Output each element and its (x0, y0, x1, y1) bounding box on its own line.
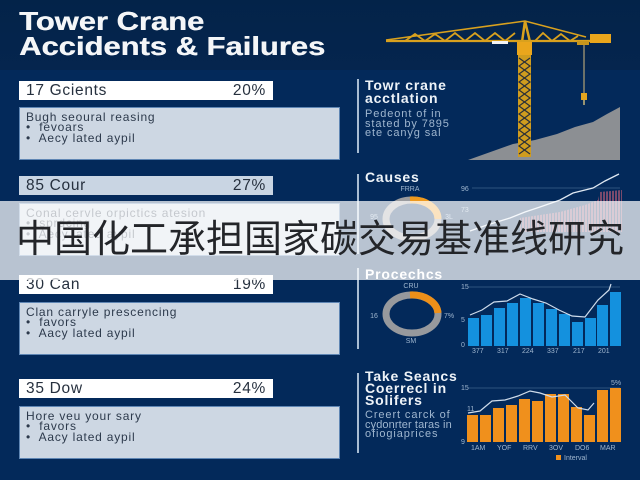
jib and truss (386, 21, 590, 42)
description 2 (19, 203, 340, 256)
bar chart: take seances: 11 (467, 406, 474, 413)
donut chart: causes: FRRA (400, 186, 420, 193)
description 2: • sprdcing (26, 216, 91, 230)
illustration: tower crane on rising grey terrain (386, 20, 620, 160)
stat bar 4 (19, 379, 273, 398)
donut chart: processes: 16 (370, 313, 378, 320)
donut chart: processes: SM (406, 338, 416, 345)
bar chart: take seances: 1AM (471, 445, 486, 452)
donut chart: causes (370, 186, 453, 240)
panel: stat 3 (19, 275, 340, 355)
donut chart: causes: 95 (370, 214, 378, 221)
panel: tower crane accidents text (357, 77, 450, 153)
stat bar 1 (19, 81, 273, 100)
stat bar 2: 27% (233, 176, 266, 194)
body text: cydonrter taras in (365, 419, 452, 431)
description 3: • Aacy lated aypil (26, 326, 135, 340)
line and bar chart: causes: 96 (461, 186, 469, 193)
bar chart: processes: 317 (497, 348, 509, 355)
stat bar 1: 17 Gcients (26, 82, 107, 98)
panel: take seances (357, 368, 458, 453)
heading (365, 77, 447, 106)
overlay banner with headline (0, 201, 640, 280)
body text (365, 108, 450, 139)
stat bar 3 (19, 275, 273, 294)
heading: Procechcs (365, 266, 443, 282)
trolley (577, 41, 589, 45)
divider rule (357, 373, 359, 453)
bar chart: processes: 217 (573, 348, 585, 355)
panel: stat 2 (19, 176, 340, 256)
bar chart: processes: 5 (461, 317, 465, 324)
description 1 (19, 107, 340, 160)
bar chart: take seances: RRV (523, 445, 538, 452)
bar chart: processes: 0 (461, 342, 465, 349)
description 2: Conal cervle orpictics atesion (26, 206, 206, 220)
bar chart: processes: 337 (547, 348, 559, 355)
donut chart: processes (370, 283, 454, 345)
title (19, 6, 325, 61)
title: Accidents & Failures (19, 31, 325, 61)
bar chart: take seances: YOF (497, 445, 511, 452)
description 1: Bugh seoural reasing (26, 110, 155, 124)
description 1: • fevoars (26, 120, 84, 134)
description 4 (19, 406, 340, 459)
bar chart: processes: 377 (472, 348, 484, 355)
bar chart: processes: 201 (598, 348, 610, 355)
description 4: Hore veu your sary (26, 409, 142, 423)
description 3 (19, 302, 340, 355)
body text (365, 409, 452, 440)
slewing unit (517, 42, 532, 55)
stat bar 3: 30 Can (26, 276, 80, 292)
heading: Solifers (365, 392, 423, 408)
divider rule (357, 268, 359, 349)
bar chart: processes (461, 284, 621, 355)
heading (365, 368, 458, 408)
heading: Take Seancs (365, 368, 458, 384)
bar chart: take seances: 5% (611, 380, 621, 387)
description 3: Clan carryle prescencing (26, 305, 177, 319)
heading: Coerrecl in (365, 380, 447, 396)
header band (0, 0, 640, 70)
bar chart: processes: 224 (522, 348, 534, 355)
body text: ete canyg sal (365, 127, 442, 139)
bar chart: take seances: 9 (461, 439, 465, 446)
donut chart: processes: CRU (403, 283, 419, 290)
body text: stated by 7895 (365, 118, 450, 130)
bar chart: processes: 15 (461, 284, 469, 291)
stat bar 1: 20% (233, 82, 266, 98)
bar chart: take seances (461, 380, 621, 462)
bar chart: take seances: DO6 (575, 445, 590, 452)
donut chart: causes: 3L (445, 214, 453, 221)
line and bar chart: causes (461, 173, 622, 232)
description 2: • Aecy lated aypil (26, 227, 135, 241)
description 1: • Aecy lated aypil (26, 131, 135, 145)
panel: stat 4 (19, 379, 340, 459)
donut chart: processes: 7% (444, 313, 454, 320)
title: Tower Crane (19, 6, 204, 36)
chart legend: Interval (564, 455, 587, 462)
counterweight (590, 34, 611, 43)
tower mast (518, 55, 531, 157)
overlay banner with headline: 中国化工承担国家碳交易基准线研究 (16, 219, 624, 261)
heading: Towr crane (365, 77, 447, 93)
body text: Creert carck of (365, 409, 451, 421)
line and bar chart: causes: 73 (461, 207, 469, 214)
divider rule (357, 174, 359, 254)
white tag (492, 41, 508, 44)
body text: ofiogiaprices (365, 428, 438, 440)
heading: acctlation (365, 90, 438, 106)
description 4: • favors (26, 419, 77, 433)
description 3: • favors (26, 315, 77, 329)
body text: Pedeont of in (365, 108, 442, 120)
bar chart: take seances: MAR (600, 445, 616, 452)
bar chart: take seances: 3OV (549, 445, 563, 452)
bar chart: take seances: 15 (461, 385, 469, 392)
panel: stat 1 (19, 81, 340, 160)
description 4: • Aacy lated aypil (26, 430, 135, 444)
stat bar 2 (19, 176, 273, 195)
stat bar 2: 85 Cour (26, 176, 86, 194)
stat bar 3: 19% (233, 276, 266, 292)
hoist cable and hook (581, 45, 587, 105)
stat bar 4: 24% (233, 380, 266, 396)
stat bar 4: 35 Dow (26, 380, 83, 396)
divider rule (357, 79, 359, 153)
heading: Causes (365, 169, 420, 185)
grey terrain (468, 107, 620, 160)
